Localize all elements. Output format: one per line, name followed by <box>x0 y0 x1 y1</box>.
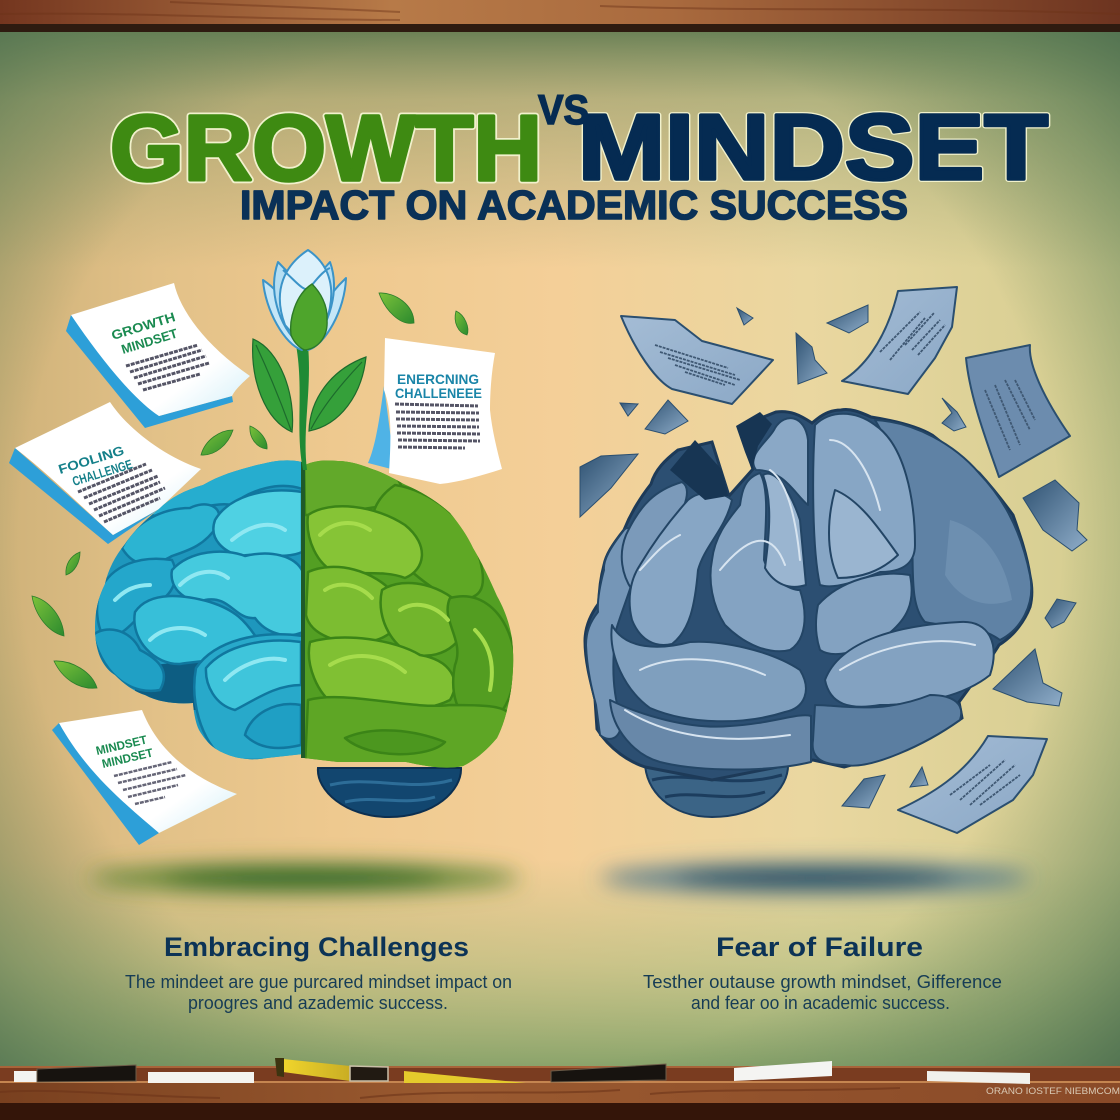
caption heading: Fear of Failure <box>716 932 923 962</box>
flower bud <box>291 284 327 350</box>
leaf <box>455 311 468 335</box>
shattered fragments <box>580 305 1087 808</box>
growth brain <box>90 455 518 817</box>
brain stem base <box>645 762 788 817</box>
caption: fear of failure: and fear oo in academic success. <box>691 993 950 1013</box>
yellow wedge <box>404 1071 526 1083</box>
top wooden rail <box>0 0 1120 32</box>
flower <box>263 250 346 350</box>
gyri <box>586 414 1031 770</box>
caption: fear of failure <box>643 932 1002 1013</box>
stem leaf right <box>309 357 366 431</box>
chalk stick <box>927 1071 1030 1084</box>
paper: fixed challenge <box>9 402 201 544</box>
papers: growth side <box>9 283 502 845</box>
leaf <box>201 430 233 455</box>
fragment <box>993 649 1062 706</box>
torn paper <box>966 345 1070 477</box>
title <box>110 86 1048 228</box>
caption: embracing challenges <box>125 932 512 1013</box>
paper: fixed challenge: FOOLING <box>56 443 126 477</box>
central fissure <box>301 462 305 758</box>
paper: embracing challenges <box>368 338 502 484</box>
subtitle: IMPACT ON ACADEMIC SUCCESS <box>240 182 908 228</box>
crack <box>670 412 772 500</box>
stem <box>296 345 309 470</box>
brain stem base <box>318 768 461 817</box>
title word: mindset: MINDSET <box>578 95 1048 199</box>
fragment <box>910 767 928 787</box>
leaf <box>32 596 64 636</box>
paper: growth mindset: MINDSET <box>119 326 179 357</box>
paper text lines <box>655 312 1035 805</box>
ground shadow: fixed brain <box>600 863 1030 893</box>
papers: fixed side <box>621 287 1070 833</box>
chalk tray <box>0 1058 1120 1120</box>
fixed brain <box>585 409 1032 817</box>
chalk stick <box>148 1072 254 1083</box>
torn paper <box>842 287 957 394</box>
paper: embracing challenges: CHALLENEEE <box>395 385 482 401</box>
title word: mindset: MINDSET <box>578 95 1048 199</box>
fragment <box>1045 599 1076 628</box>
paper: fixed challenge: CHALLENGE <box>70 456 134 489</box>
caption body: The mindeet are gue purcared mindset impact on <box>125 972 512 992</box>
fragment <box>827 305 868 333</box>
torn paper <box>621 316 773 404</box>
chalk stick <box>14 1071 38 1082</box>
fragment <box>1023 480 1087 551</box>
chalk stick <box>734 1061 832 1081</box>
growing plant <box>253 250 366 470</box>
paper: embracing challenges: ENERCNING <box>397 371 479 387</box>
leaf <box>379 293 414 323</box>
title word: vs: VS <box>538 86 589 133</box>
paper: mindset: MINDSET <box>95 732 149 758</box>
tray stamp text: ORANO IOSTEF NIEBMCOM <box>986 1086 1120 1096</box>
fragment <box>796 333 827 384</box>
fragment <box>580 454 638 517</box>
title word: growth: GROWTH <box>110 96 542 200</box>
title word: growth: GROWTH <box>110 96 542 200</box>
leaf <box>250 426 267 449</box>
green hemisphere <box>303 455 518 770</box>
leaf <box>54 661 97 688</box>
leaf <box>66 552 80 575</box>
paper: mindset: MINDSET <box>101 745 155 771</box>
leaves: floating <box>32 293 468 688</box>
paper: mindset <box>52 710 237 845</box>
paper: growth mindset <box>66 283 250 428</box>
stem leaf left <box>253 339 293 432</box>
ground shadow: growth brain <box>90 863 520 893</box>
torn paper <box>898 736 1047 833</box>
paper: growth mindset: GROWTH <box>109 309 177 343</box>
brain silhouette <box>585 409 1032 780</box>
highlights <box>625 440 975 739</box>
caption: embracing challenges: proogres and azademic success. <box>188 993 448 1013</box>
fragment <box>942 398 966 431</box>
fragment <box>842 775 885 808</box>
black marker <box>37 1065 136 1082</box>
caption heading: Embracing Challenges <box>164 932 469 962</box>
blue hemisphere <box>90 455 305 765</box>
caption body: Testher outause growth mindset, Gifference <box>643 972 1002 992</box>
fragment <box>620 403 638 416</box>
black marker <box>551 1064 666 1082</box>
fragment <box>737 308 753 325</box>
yellow marker <box>275 1058 388 1081</box>
fragment <box>645 400 688 434</box>
